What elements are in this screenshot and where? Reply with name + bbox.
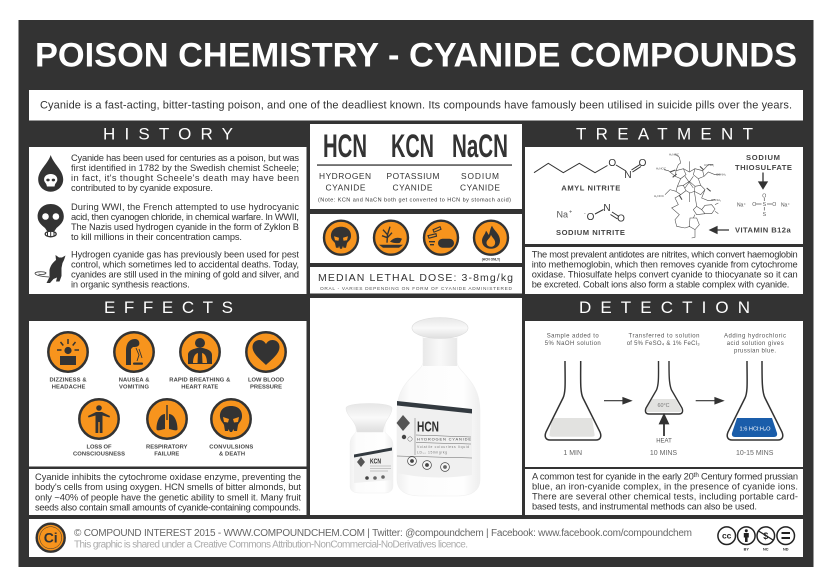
molecule: sodium nitrite: N xyxy=(603,203,611,214)
credit line: © COMPOUND INTEREST 2015 - WWW.COMPOUNDCHEM.COM | Twitter: @compoundchem | Facebook: www.facebook.com/compoundchem xyxy=(74,528,692,539)
text: history paragraph 3: control, which sometimes led to accidental deaths. Today, xyxy=(71,260,299,270)
effect: loss of consciousness: CONSCIOUSNESS xyxy=(73,451,125,457)
large bottle of hydrogen cyanide: HYDROGEN CYANIDE xyxy=(417,436,471,442)
panel: hazard symbols xyxy=(310,214,522,263)
molecule: sodium thiosulfate: O xyxy=(752,202,756,208)
panel: effects text: body's cells from using oxygen. HCN smells of bitter almonds, but xyxy=(35,482,301,492)
effect: respiratory failure: FAILURE xyxy=(154,451,179,457)
name: hydrogen cyanide xyxy=(319,171,371,192)
name: sodium cyanide: SODIUM xyxy=(461,171,499,181)
panel: detection text: based tests, and instrumental methods can also be used. xyxy=(532,502,757,512)
step 3 caption: prussian blue. xyxy=(734,348,776,354)
molecule: sodium nitrite: Na xyxy=(556,210,568,220)
icon: rat xyxy=(35,255,66,283)
panel: detection text xyxy=(525,469,803,515)
panel: detection text: blue, an iron-cyanide complex, in the presence of cyanide ions. xyxy=(532,481,798,491)
arrow: to thiosulfate xyxy=(759,172,767,188)
molecule: sodium nitrite xyxy=(556,203,625,237)
arrow: to vitamin B12a xyxy=(710,227,729,233)
molecule: amyl nitrite: O xyxy=(608,158,616,169)
effect: nausea and vomiting xyxy=(114,332,154,390)
effect: nausea and vomiting: VOMITING xyxy=(119,384,149,390)
text: history paragraph 1 xyxy=(71,153,299,193)
large bottle of hydrogen cyanide: HCN xyxy=(417,418,439,436)
molecule: sodium thiosulfate: S xyxy=(763,202,767,208)
time labels: 10 MINS xyxy=(650,450,677,457)
heading: history: HISTORY xyxy=(103,124,233,144)
effect: dizziness and headache: HEADACHE xyxy=(52,384,86,390)
step 2 caption: of 5% FeSO₄ & 1% FeCl₃ xyxy=(627,341,700,347)
text: history paragraph 3: in organic synthesis reactions. xyxy=(71,280,190,290)
panel: cyanide compounds xyxy=(310,124,522,209)
name: sodium cyanide xyxy=(460,171,500,192)
icon: toxic hazard xyxy=(324,221,358,255)
effect: rapid breathing and heart rate: RAPID BREATHING & xyxy=(169,378,230,384)
text: history paragraph 3 xyxy=(71,250,299,290)
large bottle of hydrogen cyanide xyxy=(396,318,480,496)
molecule: amyl nitrite: AMYL NITRITE xyxy=(561,184,620,193)
panel: treatment text xyxy=(525,247,803,294)
molecule: sodium thiosulfate: S xyxy=(763,212,767,218)
panel: bottle photograph xyxy=(310,298,522,515)
heading: effects: EFFECTS xyxy=(104,298,233,317)
icon: flammable hazard xyxy=(474,221,508,255)
logo: compound interest xyxy=(37,524,65,552)
molecule: sodium nitrite: O xyxy=(587,212,595,223)
effect: dizziness and headache xyxy=(48,332,88,390)
text: history paragraph 2 xyxy=(71,202,299,242)
molecule: sodium thiosulfate xyxy=(737,194,790,218)
effect: rapid breathing and heart rate: HEART RATE xyxy=(181,384,218,390)
panel: detection text: A common test for cyanide in the early 20ᵗʰ Century formed prussian xyxy=(532,471,798,481)
molecule: sodium thiosulfate: Na⁺ xyxy=(781,202,790,208)
molecule: sodium nitrite: - xyxy=(584,211,586,217)
step 1 caption xyxy=(545,334,601,347)
large bottle of hydrogen cyanide: LD₅₀ 150mg/kg xyxy=(417,450,447,454)
heading: treatment: TREATMENT xyxy=(576,124,753,144)
panel: treatment text: oxidase. Thiosulfate helps convert cyanide to thiocyanate so it can xyxy=(532,270,798,280)
effect: nausea and vomiting: NAUSEA & xyxy=(119,378,149,384)
text: history paragraph 2: acid, then cyanogen chloride, in chemical warfare. In WWII, xyxy=(71,212,299,222)
text: history paragraph 3: cyanides are still used in the mining of gold and silver, and xyxy=(71,270,299,280)
molecule: sodium thiosulfate: O xyxy=(762,194,766,200)
molecule: amyl nitrite: O xyxy=(639,158,647,169)
panel: history xyxy=(29,147,306,294)
icon: creative commons badges: BY xyxy=(744,548,749,552)
time labels xyxy=(563,450,774,457)
text: history paragraph 1: in fact, it's thought Scheele's death may have been xyxy=(71,173,299,183)
panel: effects xyxy=(29,321,306,466)
effect: rapid breathing and heart rate xyxy=(169,332,230,390)
panel: detection xyxy=(525,321,803,467)
icon: creative commons badges: $ xyxy=(763,531,768,541)
step 1 caption: 5% NaOH solution xyxy=(545,341,601,347)
panel: treatment text: be excreted. Cobalt ions also form a stable complex with cyanide. xyxy=(532,280,789,290)
effect: convulsions and death xyxy=(209,399,253,457)
text: history paragraph 1: contributed to by cyanide exposure. xyxy=(71,183,213,193)
icon: creative commons badges xyxy=(718,527,794,552)
note: (Note: KCN and NaCN both get converted to HCN by stomach acid) xyxy=(318,198,511,204)
formula: HCN: HCN xyxy=(323,128,367,164)
time labels: 1 MIN xyxy=(563,450,582,457)
label: sodium thiosulfate: SODIUM xyxy=(746,153,780,162)
molecule: amyl nitrite xyxy=(534,158,647,193)
effect: low blood pressure: LOW BLOOD xyxy=(248,378,284,384)
panel: treatment text: The most prevalent antidotes are nitrites, which convert haemoglobin xyxy=(532,249,798,259)
panel: effects text: seeds also contain small amounts of cyanide-containing compounds. xyxy=(35,502,301,512)
name: hydrogen cyanide: CYANIDE xyxy=(326,182,366,192)
icon: creative commons badges: ND xyxy=(783,548,789,552)
molecule: vitamin B12a: CONH₂ xyxy=(711,198,722,202)
text: history paragraph 1: first identified in 1782 by the Swedish chemist Scheele; xyxy=(71,163,299,173)
flask 3 with blue solution xyxy=(727,361,783,440)
formula: KCN: KCN xyxy=(391,128,434,164)
small bottle of potassium cyanide: KCN xyxy=(370,456,381,466)
step 2 caption xyxy=(627,334,700,347)
molecule: sodium nitrite: O xyxy=(617,214,625,224)
molecule: vitamin B12a xyxy=(654,152,727,238)
arrow: step 2 to 3 xyxy=(696,398,723,404)
effect: convulsions and death: & DEATH xyxy=(219,451,245,457)
step 3 caption: Adding hydrochloric xyxy=(724,334,786,340)
licence line: This graphic is shared under a Creative Commons Attribution-NonCommercial-NoDerivatives licence. xyxy=(74,540,468,550)
title: POISON CHEMISTRY - CYANIDE COMPOUNDS xyxy=(35,36,797,74)
panel: treatment structures xyxy=(525,147,803,244)
heading: detection: DETECTION xyxy=(579,298,750,317)
flask 2 xyxy=(645,361,683,414)
panel: treatment text: into methemoglobin, which then removes cyanide from cytochrome xyxy=(532,259,798,269)
panel: effects text: Cyanide inhibits the cytochrome oxidase enzyme, preventing the xyxy=(35,472,301,482)
panel: median lethal dose: MEDIAN LETHAL DOSE: 3-8mg/kg xyxy=(318,272,513,284)
icon: poison drop with skull xyxy=(38,155,63,192)
molecule: vitamin B12a: CONH₂ xyxy=(716,172,727,176)
molecule: vitamin B12a: H₂NOC xyxy=(654,194,665,198)
arrow: step 1 to 2 xyxy=(604,398,631,404)
intro text panel: Cyanide is a fast-acting, bitter-tasting poison, and one of the deadliest known. Its compounds have famously been utilised in suicide pills over the years. xyxy=(40,100,792,112)
large bottle of hydrogen cyanide: Volatile colourless liquid xyxy=(417,445,469,449)
flask 1 xyxy=(545,361,601,440)
label: vitamin B12a: VITAMIN B12a xyxy=(735,226,791,234)
effect: convulsions and death: CONVULSIONS xyxy=(209,444,253,450)
footer xyxy=(29,519,803,557)
molecule: sodium nitrite: + xyxy=(569,210,572,216)
text: history paragraph 3: Hydrogen cyanide gas has previously been used for pest xyxy=(71,250,299,260)
molecule: vitamin B12a: CONH₂ xyxy=(704,163,715,167)
text: history paragraph 2: The Nazis used hydrogen cyanide in the form of Zyklon B xyxy=(71,222,299,232)
label: sodium thiosulfate: THIOSULFATE xyxy=(735,163,792,172)
label: heat: HEAT xyxy=(656,438,672,444)
arrow: heat xyxy=(660,415,668,436)
icon: creative commons badges: cc xyxy=(722,531,732,541)
panel: detection text: There are several other chemical tests, including portable card- xyxy=(532,492,798,502)
text: history paragraph 1: Cyanide has been used for centuries as a poison, but was xyxy=(71,153,299,163)
icon: corrosive hazard xyxy=(424,221,458,255)
effect: loss of consciousness: LOSS OF xyxy=(86,444,112,450)
molecule: sodium nitrite: SODIUM NITRITE xyxy=(556,228,625,237)
effect: loss of consciousness xyxy=(73,399,125,457)
name: hydrogen cyanide: HYDROGEN xyxy=(319,171,371,181)
molecule: vitamin B12a: H₂NOC xyxy=(669,152,680,156)
molecule: sodium thiosulfate: Na⁺ xyxy=(737,202,746,208)
formula: NaCN: NaCN xyxy=(452,128,508,164)
molecule: sodium thiosulfate: O xyxy=(772,202,776,208)
time labels: 10-15 MINS xyxy=(736,450,774,457)
panel: effects text xyxy=(29,469,306,515)
small bottle of potassium cyanide xyxy=(346,404,393,493)
icon: creative commons badges: NC xyxy=(763,548,769,552)
panel: effects text: only ~40% of people have the genetic ability to smell it. Many fruit xyxy=(35,492,301,502)
name: potassium cyanide: POTASSIUM xyxy=(386,171,440,181)
name: sodium cyanide: CYANIDE xyxy=(460,182,500,192)
step 3 caption: acid solution gives xyxy=(727,341,784,347)
molecule: amyl nitrite: N xyxy=(624,170,632,181)
step 3 caption xyxy=(724,334,786,354)
panel: median lethal dose xyxy=(310,267,522,294)
name: potassium cyanide xyxy=(386,171,440,192)
intro text panel xyxy=(29,90,803,120)
panel: median lethal dose: ORAL - VARIES DEPENDING ON FORM OF CYANIDE ADMINISTERED xyxy=(320,286,513,292)
flask 3 with blue solution: 1:6 HCl:H₂O xyxy=(740,426,771,432)
effect: respiratory failure: RESPIRATORY xyxy=(146,444,188,450)
effect: respiratory failure xyxy=(146,399,188,457)
logo: compound interest: Ci xyxy=(44,530,58,546)
caption: HCN only: (HCN ONLY) xyxy=(482,258,500,262)
flask 2: 60°C xyxy=(657,403,670,409)
name: potassium cyanide: CYANIDE xyxy=(392,182,433,192)
step 1 caption: Sample added to xyxy=(547,334,599,340)
molecule: vitamin B12a: H₂NOC xyxy=(656,166,667,170)
label: sodium thiosulfate xyxy=(735,153,792,172)
text: history paragraph 2: During WWI, the French attempted to use hydrocyanic xyxy=(71,202,299,212)
icon: environmental hazard xyxy=(374,221,408,255)
step 2 caption: Transferred to solution xyxy=(628,334,700,340)
effect: dizziness and headache: DIZZINESS & xyxy=(50,378,86,384)
effect: low blood pressure xyxy=(246,332,286,390)
effect: low blood pressure: PRESSURE xyxy=(250,384,282,390)
text: history paragraph 2: to kill millions in their concentration camps. xyxy=(71,232,242,242)
icon: gas mask xyxy=(38,204,64,237)
